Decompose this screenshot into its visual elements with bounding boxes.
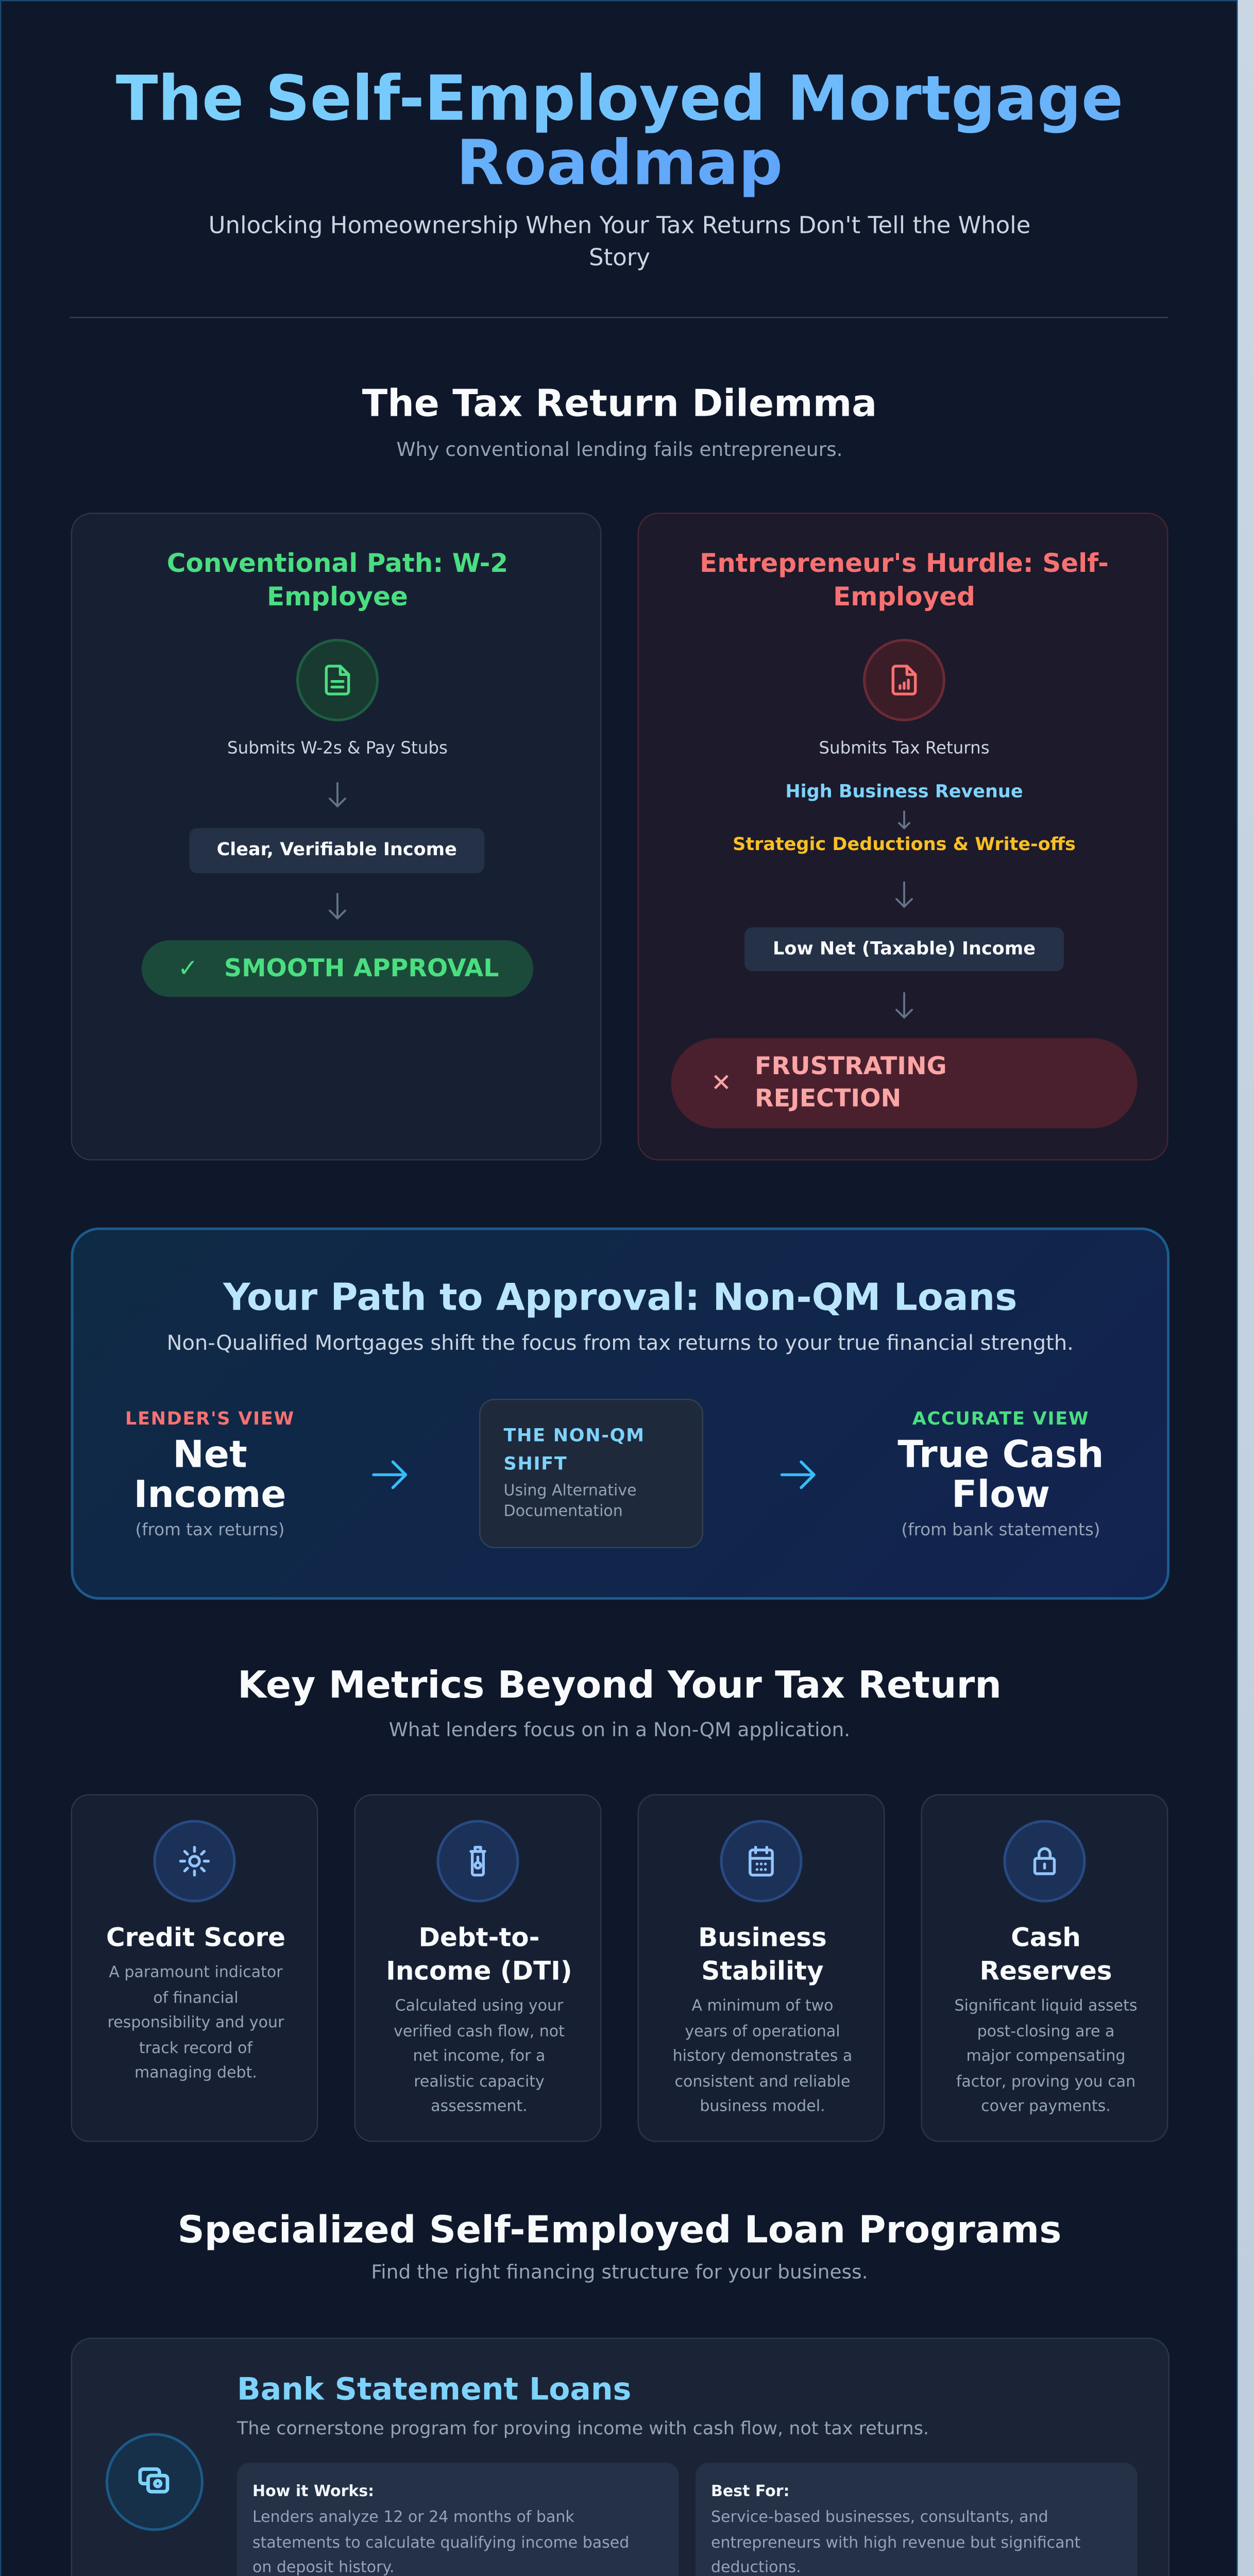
card: business stability xyxy=(638,1794,885,2142)
title: dti: Debt-to- xyxy=(419,1922,539,1953)
arrow: down xyxy=(895,881,913,908)
icon: tax document xyxy=(863,639,945,721)
card: credit score xyxy=(71,1794,318,2142)
text: business desc: A minimum of two xyxy=(691,1996,834,2014)
subheading: dilemma: Why conventional lending fails entrepreneurs. xyxy=(396,438,843,461)
column: accurate view xyxy=(897,1409,1104,1540)
column: accurate view: ACCURATE VIEW xyxy=(912,1409,1089,1430)
heading: loan programs: Specialized Self-Employed Loan Programs xyxy=(178,2208,1061,2251)
icon: document xyxy=(296,639,379,721)
arrow: down xyxy=(895,992,913,1019)
box: best for xyxy=(696,2463,1138,2576)
pill: frustrating rejection: FRUSTRATING xyxy=(755,1052,947,1081)
arrow: down xyxy=(329,782,346,808)
pill: frustrating rejection: REJECTION xyxy=(755,1084,901,1113)
card: cash reserves xyxy=(921,1794,1168,2142)
subheading: key metrics: What lenders focus on in a Non-QM application. xyxy=(389,1718,850,1741)
heading: key metrics: Key Metrics Beyond Your Tax Return xyxy=(238,1663,1002,1706)
title: dti: Income (DTI) xyxy=(386,1955,572,1986)
icon: credit xyxy=(154,1820,236,1902)
subtitle: Unlocking Homeownership When Your Tax Returns Don't Tell the Whole xyxy=(209,212,1030,240)
text: business desc: history demonstrates a xyxy=(673,2046,852,2065)
box: the non-qm shift: SHIFT xyxy=(504,1454,568,1475)
box: best for: Service-based businesses, consultants, and xyxy=(711,2508,1048,2526)
subtitle xyxy=(209,212,1030,272)
text: dti desc xyxy=(394,1996,565,2115)
title: business stability: Stability xyxy=(701,1955,824,1986)
panel: entrepreneur hurdle xyxy=(638,513,1168,1160)
title: business stability xyxy=(698,1922,827,1986)
title xyxy=(116,62,1123,200)
heading: entrepreneur: Entrepreneur's Hurdle: Self- xyxy=(700,547,1109,578)
card: dti xyxy=(354,1794,602,2142)
text: dti desc: assessment. xyxy=(431,2097,528,2115)
heading: entrepreneur xyxy=(700,547,1109,611)
arrow: right 1 xyxy=(372,1460,407,1489)
box: low net income xyxy=(744,927,1064,971)
column: lender view: Income xyxy=(133,1472,286,1516)
box: how it works: Lenders analyze 12 or 24 months of bank xyxy=(252,2508,574,2526)
arrow: right 2 xyxy=(780,1460,816,1489)
heading: entrepreneur: Employed xyxy=(833,580,975,611)
text: business desc xyxy=(639,1994,886,2120)
heading: conventional: Employee xyxy=(267,580,408,611)
pill: frustrating rejection: ✕ xyxy=(711,1069,732,1097)
text: business desc: years of operational xyxy=(685,2022,840,2040)
text: deductions: Strategic Deductions & Write-offs xyxy=(733,835,1076,855)
text: credit desc xyxy=(108,1963,284,2081)
pill: smooth approval: ✓ xyxy=(178,954,198,983)
text: cash desc: cover payments. xyxy=(981,2097,1111,2115)
title: cash reserves: Cash xyxy=(1011,1922,1081,1953)
text: cash desc xyxy=(922,1994,1170,2120)
arrow: small down xyxy=(898,810,910,829)
title: cash reserves: Reserves xyxy=(979,1955,1112,1986)
text: dti desc: verified cash flow, not xyxy=(394,2022,565,2040)
text: non-qm description: Non-Qualified Mortgages shift the focus from tax returns to your true financial strength. xyxy=(167,1330,1074,1355)
column: lender view xyxy=(125,1409,295,1540)
title: cash reserves xyxy=(922,1921,1170,1988)
heading: non-qm: Your Path to Approval: Non-QM Loans xyxy=(223,1275,1017,1319)
text: dti desc: net income, for a xyxy=(413,2046,545,2065)
icon: calendar xyxy=(720,1820,803,1902)
card: bank statement loans xyxy=(71,2338,1170,2576)
title: dti xyxy=(386,1922,572,1986)
heading: tax return dilemma: The Tax Return Dilemma xyxy=(362,381,877,425)
panel: conventional path xyxy=(71,513,602,1160)
box: best for: Best For: xyxy=(711,2482,790,2500)
title: The Self-Employed Mortgage xyxy=(116,62,1123,134)
heading: conventional: Conventional Path: W-2 xyxy=(167,547,508,578)
text: dti desc: realistic capacity xyxy=(414,2072,545,2090)
title: Roadmap xyxy=(456,128,783,200)
text: high revenue: High Business Revenue xyxy=(785,782,1023,803)
box: the non-qm shift xyxy=(479,1399,703,1548)
subheading: loan programs: Find the right financing structure for your business. xyxy=(371,2261,868,2283)
box: how it works: How it Works: xyxy=(252,2482,374,2500)
box: how it works: statements to calculate qualifying income based xyxy=(252,2533,629,2551)
column: lender view: LENDER'S VIEW xyxy=(125,1409,295,1430)
text: dti desc: Calculated using your xyxy=(395,1996,563,2014)
title: bank statement loans: Bank Statement Loans xyxy=(237,2371,631,2407)
column: lender view: Net xyxy=(173,1432,247,1476)
text: credit desc: managing debt. xyxy=(134,2063,257,2081)
text: credit desc: of financial xyxy=(153,1988,239,2006)
box: clear income xyxy=(190,828,484,873)
text: business desc: business model. xyxy=(700,2097,825,2115)
box: the non-qm shift: Documentation xyxy=(504,1502,623,1520)
icon: bank money xyxy=(106,2433,204,2531)
icon: lock xyxy=(1004,1820,1086,1902)
box: best for: deductions. xyxy=(711,2558,801,2576)
text: submits tax returns: Submits Tax Returns xyxy=(819,739,990,758)
text: credit desc: track record of xyxy=(139,2038,252,2056)
text: submits w-2s: Submits W-2s & Pay Stubs xyxy=(227,739,448,758)
column: accurate view: Flow xyxy=(952,1472,1050,1516)
box: clear income: Clear, Verifiable Income xyxy=(217,840,457,860)
text: credit desc: responsibility and your xyxy=(108,2013,284,2031)
icon: dti xyxy=(437,1820,519,1902)
box: best for: entrepreneurs with high revenue but significant xyxy=(711,2533,1080,2551)
box: the non-qm shift: Using Alternative xyxy=(504,1481,637,1499)
column: accurate view: (from bank statements) xyxy=(902,1521,1100,1540)
pill: smooth approval: SMOOTH APPROVAL xyxy=(224,954,499,983)
box: how it works: on deposit history. xyxy=(252,2558,395,2576)
box: low net income: Low Net (Taxable) Income xyxy=(773,939,1036,959)
heading: conventional xyxy=(167,547,508,611)
text: credit desc: A paramount indicator xyxy=(109,1963,283,1981)
text: cash desc: major compensating xyxy=(967,2046,1125,2065)
text: business desc: consistent and reliable xyxy=(674,2072,851,2090)
pill: smooth approval xyxy=(142,940,533,997)
column: lender view: (from tax returns) xyxy=(135,1521,284,1540)
text: cash desc: post-closing are a xyxy=(977,2022,1114,2040)
text: bank desc: The cornerstone program for proving income with cash flow, not tax returns. xyxy=(237,2419,929,2439)
arrow: down xyxy=(329,893,346,920)
panel: non-qm path xyxy=(71,1227,1170,1600)
box: the non-qm shift: THE NON-QM xyxy=(504,1426,645,1447)
title: credit score: Credit Score xyxy=(106,1922,285,1953)
text: cash desc: factor, proving you can xyxy=(956,2072,1136,2090)
text: cash desc: Significant liquid assets xyxy=(954,1996,1138,2014)
box: how it works xyxy=(237,2463,679,2576)
column: accurate view: True Cash xyxy=(897,1432,1104,1476)
title: business stability: Business xyxy=(698,1922,827,1953)
subtitle: Story xyxy=(589,245,650,272)
pill: frustrating rejection xyxy=(671,1038,1138,1128)
